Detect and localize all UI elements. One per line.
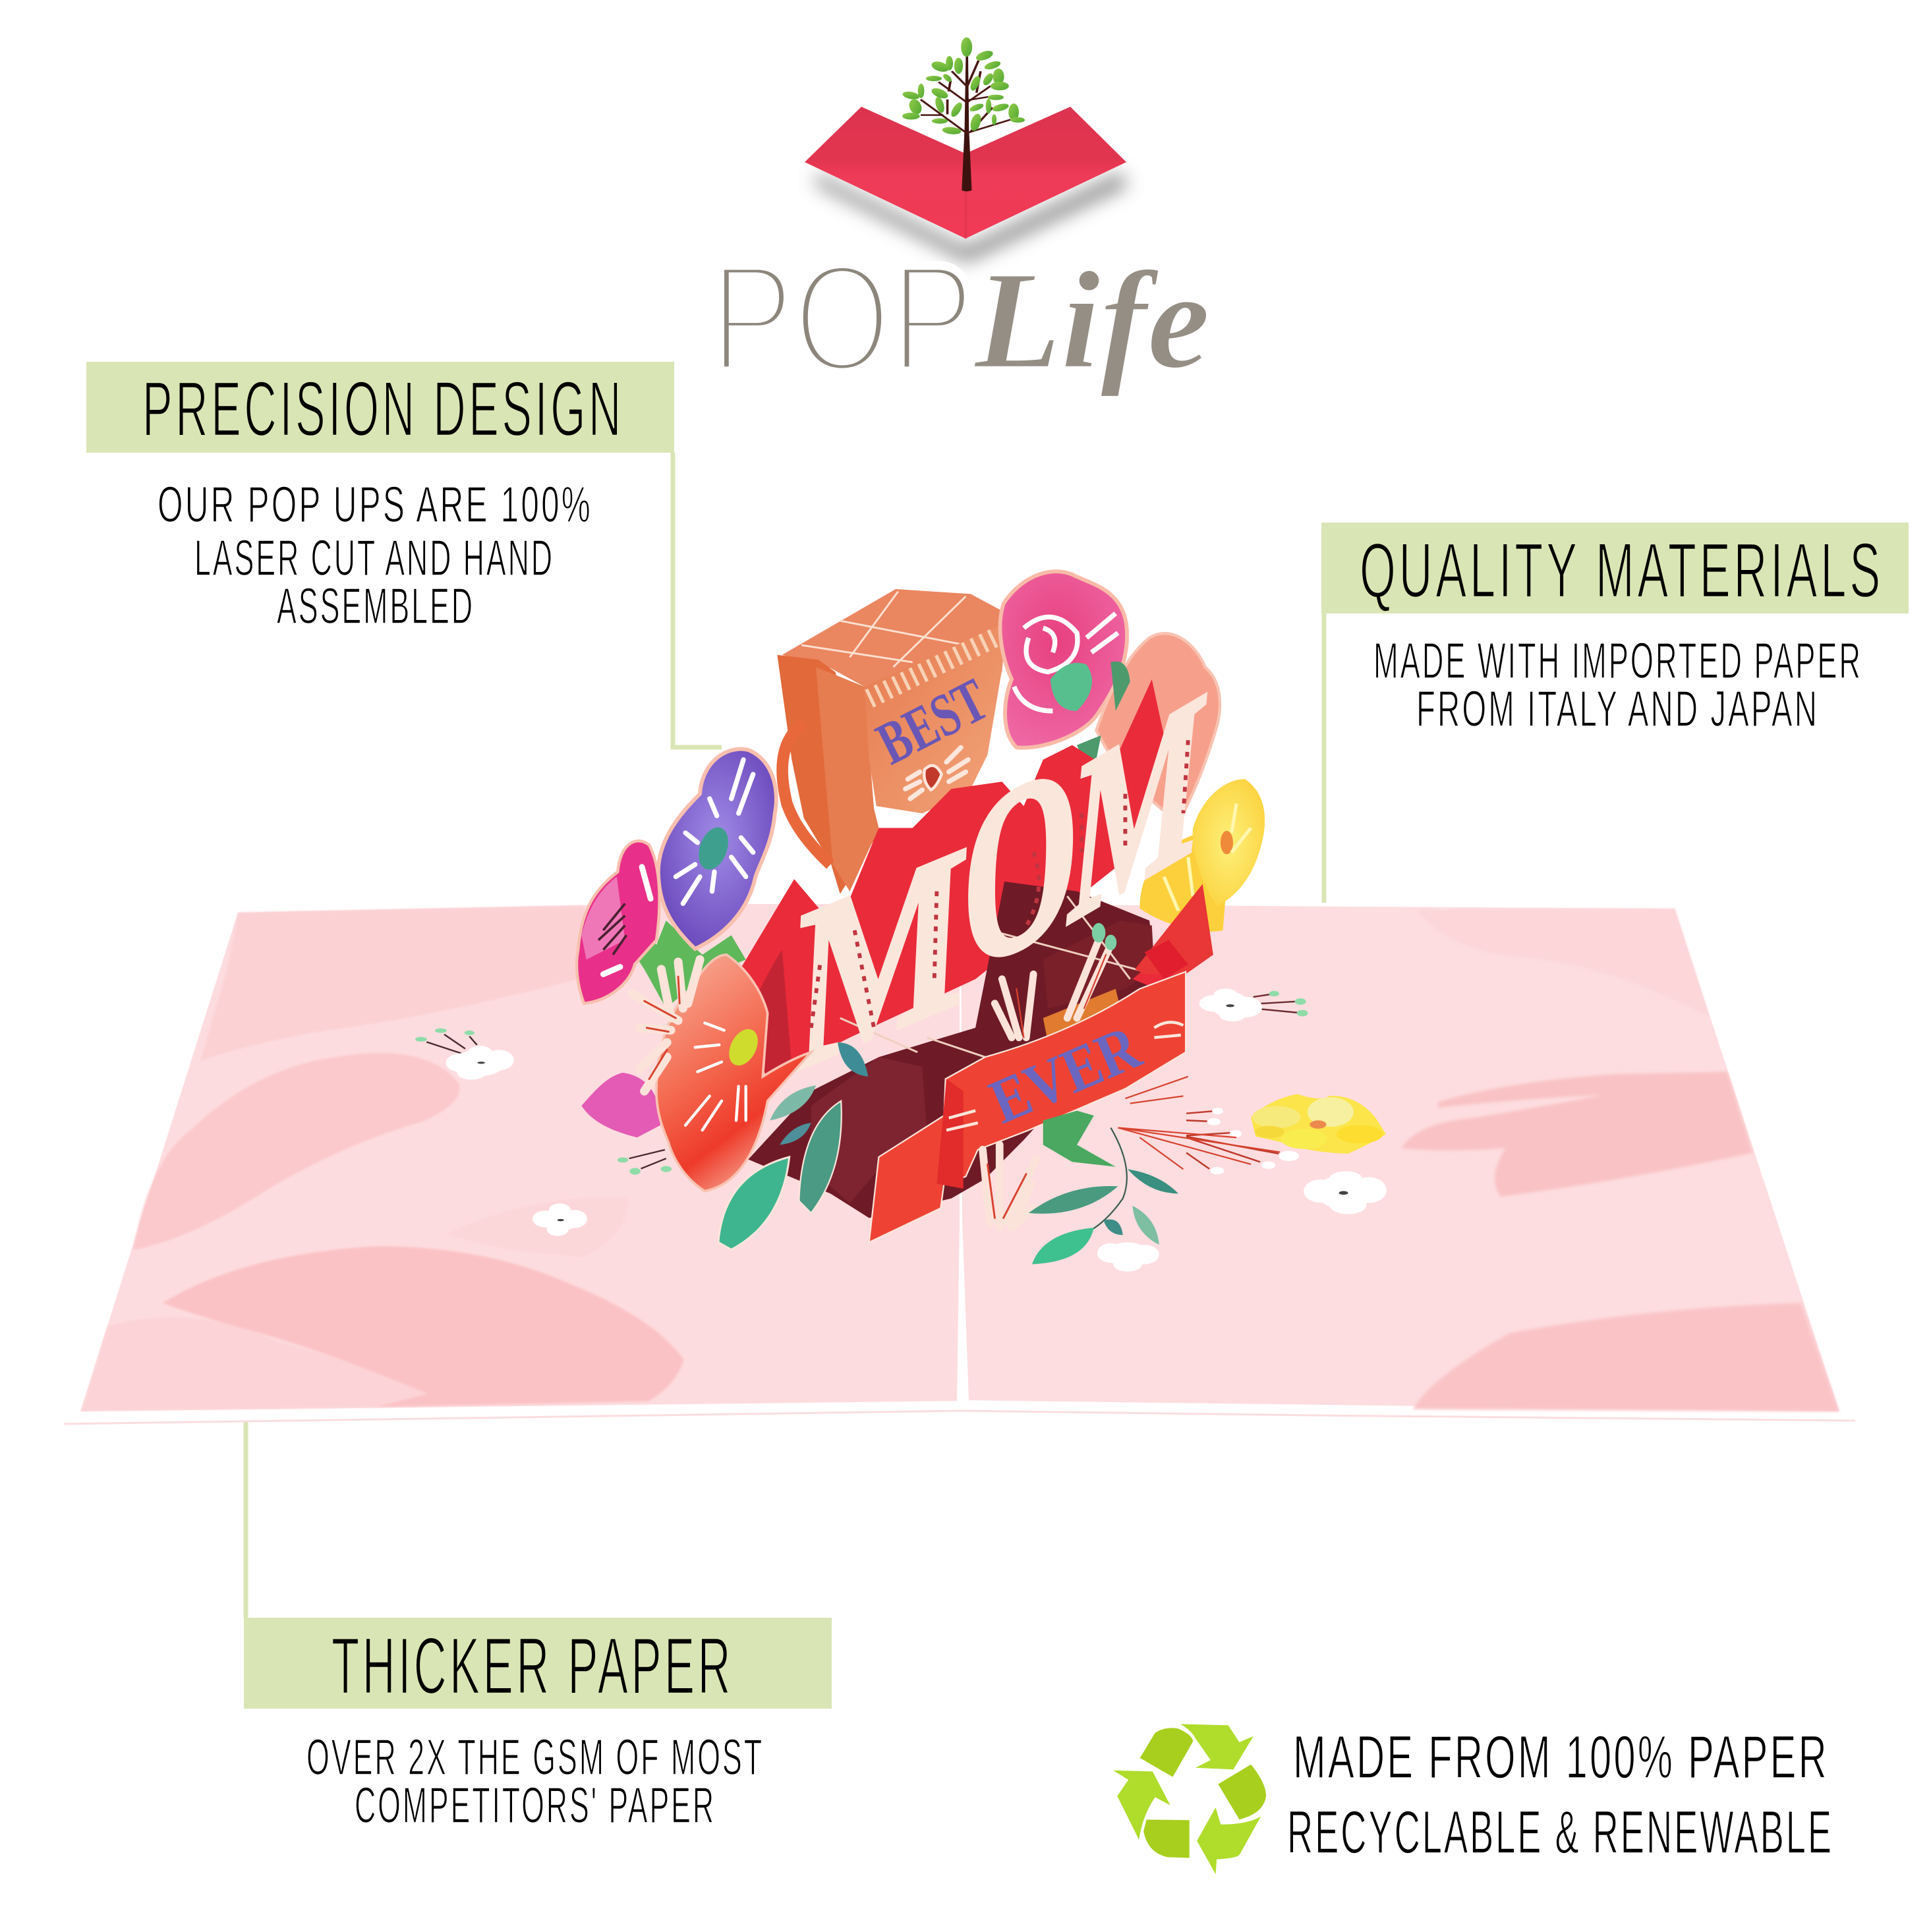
maroon inner box — [748, 882, 1188, 1218]
green leaves — [625, 921, 746, 1008]
MOM lettering: M — [1060, 636, 1216, 977]
logo tree — [901, 38, 1025, 191]
small magenta flower — [581, 1073, 660, 1137]
logo book shadow — [815, 173, 1128, 262]
text: precision design body — [158, 476, 592, 635]
BEST lettering: BEST — [867, 665, 998, 778]
yellow flower — [1251, 1094, 1386, 1154]
coral flower — [656, 955, 811, 1191]
panel: thicker paper heading: THICKER PAPER — [331, 1621, 734, 1711]
lower lily — [983, 1145, 1036, 1228]
text: thicker paper body — [306, 1729, 764, 1834]
small white flower bottom — [1097, 1242, 1159, 1272]
logo wordmark: POP: POP — [710, 233, 974, 404]
MOM lettering: M — [790, 793, 973, 1122]
text: precision design body: OUR POP UPS ARE 100% — [158, 476, 592, 533]
EVER lettering: EVER — [980, 1011, 1150, 1137]
text: precision design body: ASSEMBLED — [277, 578, 475, 635]
MOM lettering: O — [958, 705, 1083, 1027]
purple anemone — [658, 749, 776, 949]
green sprig right — [1029, 1127, 1178, 1264]
green leaves right — [1043, 1111, 1116, 1167]
logo wordmark: Life: Life — [973, 242, 1210, 397]
MOM lettering — [790, 636, 1216, 1122]
panel: precision design heading: PRECISION DESIGN — [142, 366, 624, 453]
red sprig — [1186, 1111, 1279, 1169]
text: precision design body: LASER CUT AND HAND — [194, 530, 554, 586]
text: recyclable statement — [1287, 1724, 1833, 1866]
yellow flowers — [1139, 779, 1265, 932]
card left panel — [80, 904, 960, 1411]
connector line: precision design — [673, 453, 722, 747]
MOM cut-out details — [811, 740, 1188, 1028]
card white base — [64, 909, 1855, 1424]
icon: recycle — [1113, 1724, 1266, 1874]
card bottom edge — [64, 1411, 1855, 1424]
logo open book — [805, 107, 1126, 239]
pink rose — [1000, 571, 1127, 748]
trophy cup — [777, 589, 1007, 894]
connector line: quality materials — [1322, 613, 1326, 903]
panel: thicker paper heading — [244, 1618, 832, 1711]
green leaf behind — [1077, 662, 1130, 770]
panel: precision design heading — [86, 362, 674, 453]
connector line: thicker paper — [244, 1422, 248, 1618]
Ever ribbon — [869, 884, 1213, 1242]
magenta flower — [577, 841, 660, 1004]
left white lily — [632, 959, 700, 1091]
left panel small flowers — [415, 1029, 672, 1236]
red MOM backing — [732, 679, 1164, 1079]
right panel small flowers — [1186, 988, 1387, 1214]
text: thicker paper body: OVER 2X THE GSM OF MOST — [306, 1729, 764, 1786]
red sprigs right — [1118, 1077, 1280, 1169]
pop-up card photo — [64, 571, 1855, 1424]
peach flower — [1096, 633, 1220, 823]
lily inside box — [994, 940, 1110, 1038]
3D pop-up: Best Mom Ever bouquet — [577, 571, 1280, 1272]
text: quality materials body — [1373, 633, 1862, 737]
teal leaves left — [718, 1042, 868, 1249]
text: thicker paper body: COMPETITORS' PAPER — [355, 1777, 716, 1834]
logo — [710, 38, 1210, 404]
card right panel — [961, 904, 1839, 1411]
